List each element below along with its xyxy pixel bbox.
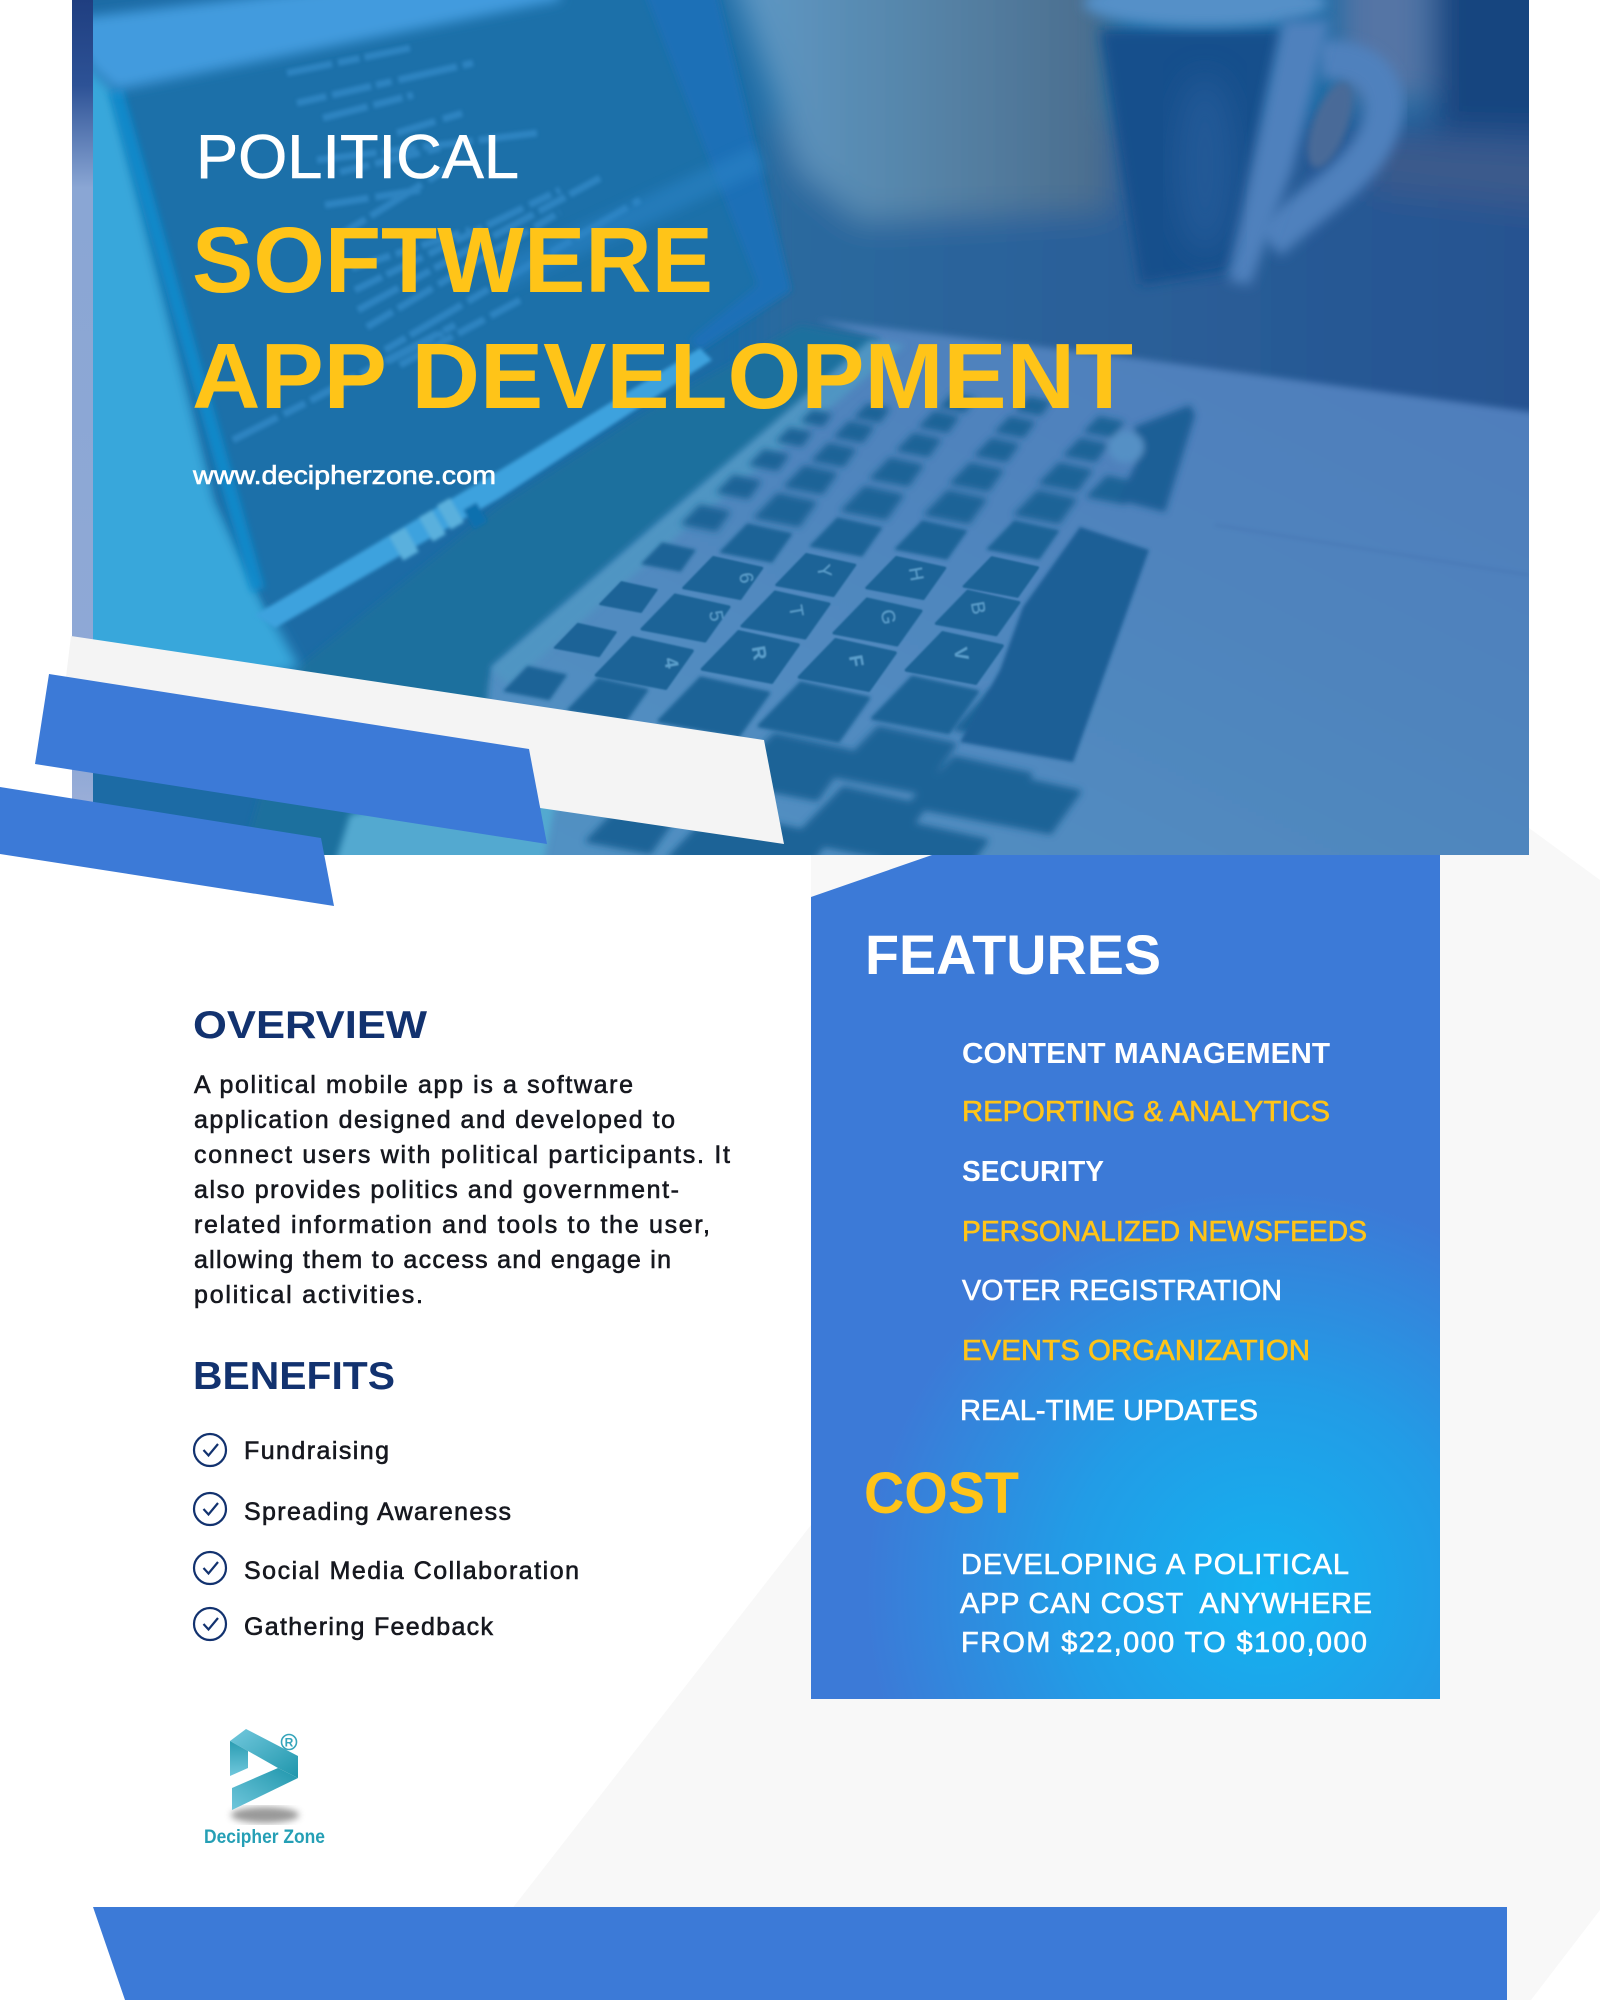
features list: VOTER REGISTRATION — [962, 1275, 1282, 1307]
keyboard near keys with labels: Y — [812, 563, 835, 579]
features list: SECURITY — [962, 1156, 1104, 1188]
icon: check circle — [194, 1434, 226, 1466]
background grey polygon — [441, 828, 1600, 2000]
table and wall behind laptop — [722, 0, 1529, 413]
title: softwere: SOFTWERE — [192, 208, 713, 312]
panel: features and cost — [811, 855, 1440, 1699]
laptop deck rim — [490, 340, 905, 685]
keyboard space bar — [960, 527, 1149, 762]
cost description — [960, 1549, 1372, 1659]
benefits heading: BENEFITS — [193, 1355, 395, 1398]
benefit: social media collaboration: Social Media Collaboration — [244, 1557, 579, 1585]
trackpad edge — [1215, 525, 1529, 575]
cost description: DEVELOPING A POLITICAL — [961, 1549, 1349, 1581]
bottom blue band — [93, 1907, 1507, 2000]
overview text: application designed and developed to — [194, 1106, 675, 1134]
features list — [960, 1038, 1367, 1427]
keyboard near keys with labels: R — [747, 644, 770, 662]
features list: REPORTING & ANALYTICS — [962, 1096, 1330, 1128]
keyboard near keys with labels: F — [844, 654, 867, 669]
features list: CONTENT MANAGEMENT — [962, 1038, 1330, 1070]
blue slanted band lower — [0, 787, 334, 906]
title: app development: APP DEVELOPMENT — [192, 324, 1133, 428]
features heading: FEATURES — [865, 923, 1161, 986]
icon: check circle — [194, 1552, 226, 1584]
hero photo: laptop with code and mug — [72, 0, 1529, 855]
keyboard near keys with labels: B — [966, 600, 989, 616]
benefit: spreading awareness: Spreading Awareness — [244, 1498, 511, 1526]
blue slanted band upper — [35, 674, 547, 844]
benefits list — [194, 1434, 579, 1641]
cost heading: COST — [864, 1461, 1019, 1526]
screen status bar — [255, 348, 712, 628]
laptop deck — [484, 320, 1529, 855]
logo: Decipher Zone: Decipher Zone — [204, 1827, 325, 1848]
keyboard middle keys — [505, 519, 1058, 741]
overview text — [194, 1071, 730, 1309]
features list: EVENTS ORGANIZATION — [962, 1335, 1310, 1367]
features list: REAL-TIME UPDATES — [960, 1395, 1258, 1427]
logo: Decipher Zone — [204, 1729, 325, 1848]
cost description: APP CAN COST ANYWHERE — [960, 1588, 1372, 1620]
coffee mug — [1083, 0, 1384, 285]
keyboard near keys with labels: V — [949, 646, 972, 662]
keyboard near keys with labels: H — [904, 565, 927, 583]
keyboard near keys with labels — [555, 554, 1038, 690]
logo: Decipher Zone: R — [285, 1736, 294, 1750]
keyboard near keys with labels: 5 — [704, 609, 727, 623]
keyboard far keys — [587, 394, 1195, 885]
overview text: A political mobile app is a software — [194, 1071, 633, 1099]
laptop screen bright edge — [93, 68, 302, 670]
icon: check circle — [194, 1608, 226, 1640]
overview text: connect users with political participants. It — [194, 1141, 730, 1169]
keyboard near keys with labels: 6 — [734, 571, 757, 585]
overview text: allowing them to access and engage in — [194, 1246, 671, 1274]
website url: www.decipherzone.com — [192, 460, 496, 490]
title: political: POLITICAL — [196, 123, 519, 192]
overview text: political activities. — [194, 1281, 423, 1309]
keyboard near keys with labels: G — [876, 608, 899, 626]
benefit: fundraising: Fundraising — [244, 1437, 389, 1465]
keyboard near keys with labels: T — [784, 604, 807, 619]
laptop hinge — [472, 326, 880, 699]
icon: check circle — [194, 1493, 226, 1525]
decorative pale slanted band — [60, 636, 784, 844]
overview text: related information and tools to the user, — [194, 1211, 710, 1239]
screen highlight band — [500, 158, 760, 277]
features list: PERSONALIZED NEWSFEEDS — [962, 1216, 1367, 1248]
code lines on screen — [233, 48, 640, 440]
overview heading: OVERVIEW — [193, 1004, 427, 1047]
keyboard near keys with labels: 4 — [659, 656, 682, 670]
laptop screen — [218, 500, 268, 606]
benefit: gathering feedback: Gathering Feedback — [244, 1613, 494, 1641]
overview text: also provides politics and government- — [194, 1176, 679, 1204]
cost description: FROM $22,000 TO $100,000 — [961, 1627, 1367, 1659]
